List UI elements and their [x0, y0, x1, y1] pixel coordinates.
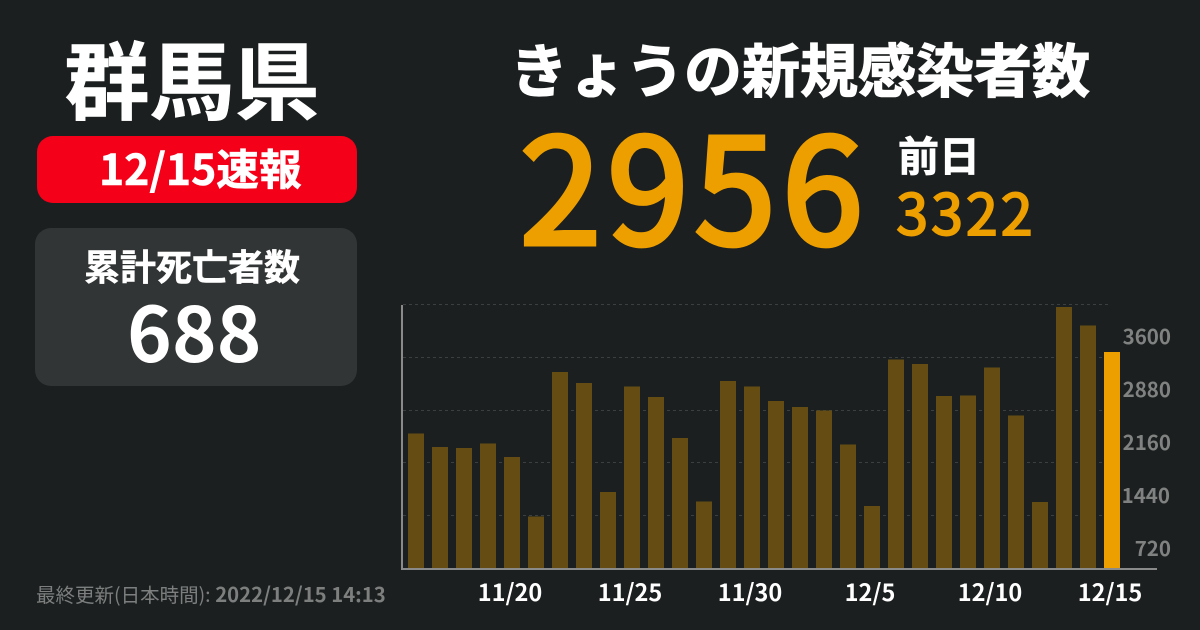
x axis labels: 11/30 [718, 574, 782, 608]
panel: cumulative deaths [35, 228, 357, 386]
y axis labels: 720 [1135, 532, 1171, 562]
grid lines [403, 304, 1110, 516]
chart axes [402, 305, 1157, 569]
heading: new cases today: きょうの新規感染者数 [510, 25, 1090, 109]
prefecture title: 群馬県 [64, 15, 320, 138]
today's new cases number: 2956 [520, 76, 869, 286]
x axis labels: 12/15 [1078, 574, 1142, 608]
daily bars [408, 307, 1096, 568]
y axis labels: 1440 [1122, 479, 1170, 509]
x axis labels [478, 574, 1142, 608]
y axis labels: 2160 [1123, 426, 1171, 456]
y axis labels [1122, 320, 1171, 562]
y axis labels: 2880 [1123, 373, 1171, 403]
current day bar [1104, 352, 1120, 568]
x axis labels: 11/25 [598, 574, 662, 608]
date badge text: 12/15速報 [99, 136, 302, 198]
x axis labels: 11/20 [478, 574, 542, 608]
last updated timestamp: 最終更新(日本時間): 2022/12/15 14:13 [36, 578, 386, 608]
deaths number: 688 [127, 274, 262, 384]
deaths label: 累計死亡者数 [84, 239, 300, 291]
x axis labels: 12/5 [845, 574, 895, 608]
previous day label: 前日 [898, 123, 980, 183]
y axis labels: 3600 [1123, 320, 1171, 350]
previous day number: 3322 [896, 170, 1036, 252]
x axis labels: 12/10 [958, 574, 1022, 608]
red date badge [37, 136, 357, 203]
